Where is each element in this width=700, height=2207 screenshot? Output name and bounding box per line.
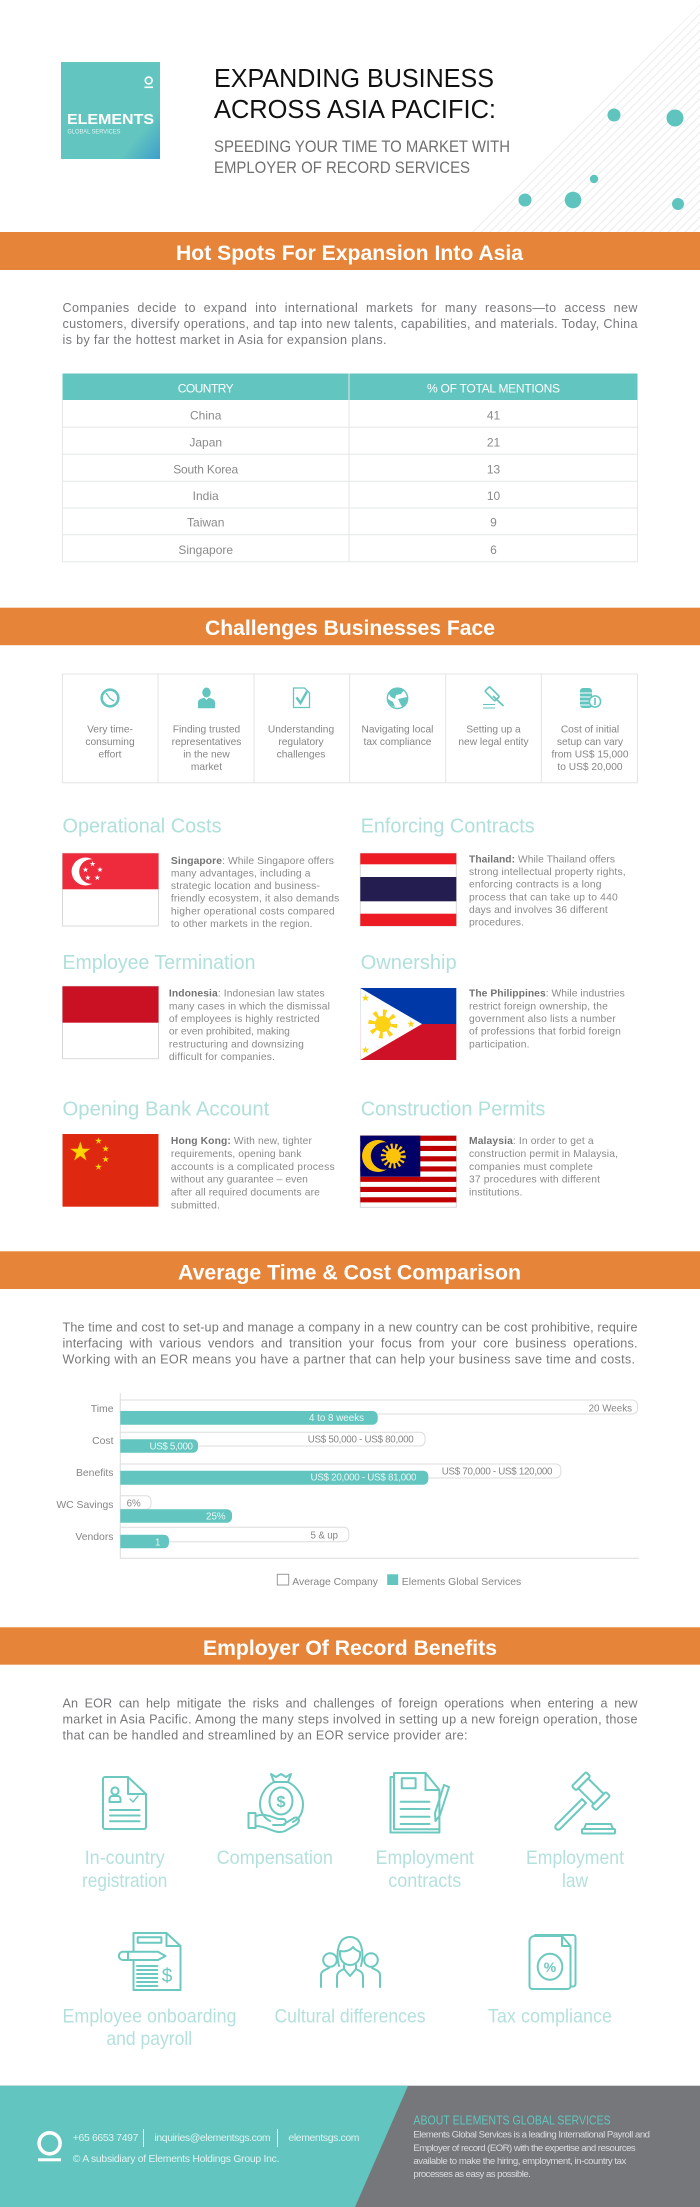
heading: enforcing contracts: Enforcing Contracts — [361, 816, 535, 838]
title: EXPANDING BUSINESS — [214, 65, 494, 93]
label: employment contracts: contracts — [388, 1870, 462, 1892]
text: Thailand: enforcing contracts is a long — [469, 880, 602, 891]
text: Thailand: procedures. — [469, 918, 524, 929]
text: Indonesia: Indonesia: Indonesian law states — [169, 989, 325, 1000]
challenge text: legal entity — [458, 724, 530, 748]
text: Malaysia: companies must complete — [469, 1162, 593, 1173]
table: hot spots: 13 — [487, 462, 500, 476]
text: Singapore: strategic location and business- — [171, 881, 320, 892]
text: Thailand: days and involves 36 different — [469, 905, 608, 916]
table: hot spots: Japan — [189, 436, 222, 450]
about text: ABOUT ELEMENTS GLOBAL SERVICES — [413, 2114, 611, 2128]
text: Hong Kong: requirements, opening bank — [171, 1149, 302, 1160]
table: hot spots: % OF TOTAL MENTIONS — [427, 382, 560, 396]
row: vendors: Vendors — [75, 1532, 114, 1543]
flag: Indonesia — [62, 986, 158, 1059]
benefit: tax compliance: % — [544, 1959, 557, 1975]
label: onboarding and payroll: Employee onboarding — [62, 2006, 236, 2028]
row: time — [91, 1400, 638, 1425]
panel: challenge grid — [62, 674, 638, 783]
row: vendors — [75, 1527, 349, 1548]
row: cost: Cost — [92, 1436, 114, 1447]
title: ACROSS ASIA PACIFIC: — [214, 96, 496, 124]
intro paragraph: benefits: An EOR can help mitigate the risks and challenges of foreign operations when entering a new — [62, 1696, 638, 1710]
challenge text: regulatory: Understanding — [268, 724, 334, 735]
row: wc savings — [56, 1496, 232, 1523]
icon: tax document — [529, 1935, 576, 1989]
benefit: cultural differences — [274, 1937, 426, 2028]
label: employment law: law — [562, 1870, 589, 1892]
section banner: benefits: Employer Of Record Benefits — [203, 1637, 497, 1660]
challenge text: regulatory — [268, 724, 334, 760]
table: hot spots: China — [190, 408, 222, 422]
text: Malaysia: institutions. — [469, 1188, 522, 1199]
section banner: challenges: Challenges Businesses Face — [205, 617, 495, 640]
row: cost: US$ 50,000 - US$ 80,000 — [308, 1435, 414, 1446]
text: Malaysia: Malaysia: In order to get a — [469, 1136, 594, 1147]
table: hot spots: 41 — [487, 408, 500, 422]
about text: processes as easy as possible. — [413, 2169, 531, 2180]
challenge text: setup cost: setup can vary — [557, 737, 624, 748]
footer contacts: +65 6653 7497 — [73, 2133, 139, 2144]
text: Singapore: many advantages, including a — [171, 868, 311, 880]
text: Philippines: The Philippines: While industries — [469, 989, 625, 1000]
intro paragraph: comparison: interfacing with various vendors and transition your focus from your core business operations. — [62, 1336, 638, 1350]
label: employment contracts — [376, 1847, 474, 1892]
panel: enforcing contracts — [360, 816, 626, 929]
row: benefits: US$ 70,000 - US$ 120,000 — [442, 1467, 553, 1478]
intro paragraph: hot spots: is by far the hottest market in Asia for expansion plans. — [62, 333, 386, 347]
intro paragraph: hot spots — [62, 301, 638, 347]
text: Malaysia: 37 procedures with different — [469, 1175, 600, 1186]
table: hot spots: India — [193, 489, 219, 503]
footer contacts — [73, 2129, 359, 2165]
challenge text: legal entity: new legal entity — [458, 737, 530, 748]
subtitle: EMPLOYER OF RECORD SERVICES — [214, 158, 470, 177]
text: Singapore: friendly ecosystem, it also demands — [171, 894, 339, 905]
panel: opening bank account — [62, 1099, 335, 1212]
text: Philippines: of professions that forbid foreign — [469, 1027, 621, 1038]
row: benefits — [76, 1464, 561, 1485]
heading: construction permits: Construction Permits — [361, 1099, 545, 1121]
table: hot spots: 21 — [487, 436, 500, 450]
challenge text: regulatory: regulatory — [278, 737, 325, 748]
challenge text: representatives: Finding trusted — [173, 724, 241, 735]
challenge text: setup cost: from US$ 15,000 — [551, 749, 629, 760]
about text: Elements Global Services is a leading International Payroll and — [413, 2130, 650, 2141]
text: Hong Kong: after all required documents are — [171, 1188, 320, 1199]
text: Thailand — [469, 854, 626, 929]
challenge text: representatives — [172, 724, 241, 773]
intro paragraph: comparison: Working with an EOR means you have a partner that can help your business save time and costs. — [62, 1352, 635, 1366]
panel: operational costs — [62, 816, 339, 930]
footer contacts: elementsgs.com — [288, 2133, 359, 2144]
table: hot spots: COUNTRY — [178, 382, 234, 396]
challenge text: setup cost: Cost of initial — [561, 724, 619, 735]
footer contacts: © A subsidiary of Elements Holdings Group Inc. — [73, 2154, 280, 2165]
label: cultural differences: Cultural differences — [274, 2006, 426, 2028]
text: Philippines: participation. — [469, 1039, 530, 1050]
about text — [413, 2114, 650, 2180]
icon: group of people — [321, 1937, 380, 1987]
section banner: challenges — [0, 608, 700, 645]
panel: employee termination — [62, 952, 330, 1063]
text: Hong Kong: without any guarantee – even — [170, 1175, 308, 1186]
table: hot spots: South Korea — [173, 462, 239, 476]
footer — [0, 2086, 700, 2207]
text: Philippines — [469, 989, 625, 1050]
text: Singapore: higher operational costs compared — [171, 906, 335, 917]
icon: document check — [294, 688, 310, 708]
row: cost: US$ 5,000 — [150, 1441, 194, 1452]
legend: Average Company — [292, 1577, 379, 1588]
row: vendors: 5 & up — [310, 1530, 339, 1541]
benefit: employee onboarding and payroll — [62, 1933, 236, 2050]
text: Singapore — [171, 856, 339, 930]
benefit: employee onboarding and payroll: $ — [162, 1966, 173, 1987]
intro paragraph: benefits — [62, 1696, 638, 1742]
text: Hong Kong: Hong Kong: With new, tighter — [171, 1136, 312, 1147]
icon: person — [198, 688, 215, 708]
text: Philippines: restrict foreign ownership, the — [469, 1001, 608, 1012]
text: Hong Kong: submitted. — [171, 1201, 220, 1212]
challenge text: regulatory: challenges — [277, 749, 325, 760]
section banner: benefits — [0, 1627, 700, 1665]
footer logo — [38, 2133, 61, 2161]
logo: ELEMENTS — [67, 111, 154, 128]
subtitle: SPEEDING YOUR TIME TO MARKET WITH — [214, 137, 510, 156]
intro paragraph: comparison — [62, 1320, 638, 1366]
icon: contract with pen — [390, 1773, 449, 1832]
challenge text: representatives: representatives — [172, 737, 241, 748]
row: benefits: Benefits — [76, 1468, 114, 1479]
challenge text: representatives: market — [191, 762, 222, 773]
icon: small gavel — [483, 687, 504, 708]
row: time: Time — [91, 1404, 114, 1415]
text: Singapore: to other markets in the region. — [171, 919, 312, 930]
label: in-country registration: In-country — [85, 1847, 165, 1869]
about text: available to make the hiring, employment, in-country tax — [413, 2156, 627, 2167]
challenge text: time: Very time- — [87, 724, 133, 735]
icon: clock — [102, 690, 118, 706]
benefit: compensation: $ — [277, 1794, 286, 1811]
panel: construction permits — [360, 1099, 618, 1207]
table: hot spots: Taiwan — [187, 516, 224, 530]
bar chart: time and cost — [56, 1393, 639, 1558]
benefit: employment contracts — [376, 1773, 474, 1892]
row: wc savings: WC Savings — [56, 1500, 114, 1511]
heading: ownership: Ownership — [361, 952, 457, 974]
challenge text: tax — [362, 724, 433, 748]
label: employment law — [526, 1847, 625, 1892]
text: Indonesia: of employees is highly restricted — [169, 1014, 320, 1025]
flag: Malaysia — [360, 1136, 456, 1207]
challenge text: representatives: in the new — [183, 749, 230, 760]
subtitle — [214, 137, 510, 177]
section banner: comparison — [0, 1251, 700, 1289]
flag: Singapore — [62, 853, 158, 926]
table: hot spots: Singapore — [178, 543, 233, 557]
table: hot spots: 9 — [490, 516, 497, 530]
text: Indonesia: many cases in which the dismissal — [169, 1001, 330, 1012]
intro paragraph: hot spots: customers, diversify operations, and tap into new talents, capabilities, and materials. Today, China — [62, 317, 637, 331]
row: wc savings: 6% — [127, 1499, 141, 1510]
flag: Thailand — [360, 853, 456, 926]
intro paragraph: hot spots: Companies decide to expand into international markets for many reasons—to access new — [62, 301, 638, 315]
text: Philippines: government also lists a number — [469, 1014, 616, 1025]
row: benefits: US$ 20,000 - US$ 81,000 — [310, 1473, 417, 1484]
benefit: tax compliance — [488, 1935, 612, 2028]
label: tax compliance: Tax compliance — [488, 2006, 612, 2028]
about text: Employer of record (EOR) with the expertise and resources — [413, 2143, 636, 2154]
heading: employee termination: Employee Termination — [62, 952, 256, 974]
panel: ownership — [360, 952, 625, 1060]
icon: money bag in hand — [248, 1774, 303, 1832]
challenge text: time — [85, 724, 135, 760]
intro paragraph: benefits: that can be handled and streamlined by an EOR service provider are: — [62, 1728, 468, 1742]
legend — [277, 1574, 521, 1588]
challenge text: time: consuming — [85, 737, 135, 748]
legend: Elements Global Services — [402, 1577, 521, 1588]
text: Malaysia: construction permit in Malaysia, — [469, 1149, 618, 1160]
text: Thailand: strong intellectual property rights, — [469, 867, 626, 878]
challenge text: setup cost — [551, 724, 629, 773]
row: cost — [92, 1432, 425, 1453]
title — [214, 65, 496, 124]
row: wc savings: 25% — [206, 1512, 226, 1523]
label: employment law: Employment — [526, 1847, 625, 1869]
row: vendors: 1 — [155, 1537, 160, 1548]
text: Malaysia — [469, 1136, 618, 1199]
text: Indonesia — [169, 989, 330, 1063]
challenge text: setup cost: to US$ 20,000 — [557, 762, 623, 773]
label: onboarding and payroll: and payroll — [106, 2028, 192, 2050]
icon: gavel — [555, 1772, 615, 1834]
label: compensation: Compensation — [217, 1847, 333, 1869]
text: Indonesia: or even prohibited, making — [169, 1027, 290, 1038]
label: in-country registration — [82, 1847, 167, 1892]
icon: globe — [387, 688, 408, 708]
text: Indonesia: difficult for companies. — [169, 1052, 275, 1063]
challenge text: tax: Navigating local — [362, 724, 433, 735]
intro paragraph: benefits: market in Asia Pacific. Among the many steps involved in setting up a new foreign operation, those — [62, 1712, 638, 1726]
background hatch with dots — [469, 5, 700, 232]
benefit: employment law — [526, 1772, 625, 1892]
challenge text: legal entity: Setting up a — [466, 724, 521, 735]
label: in-country registration: registration — [82, 1870, 167, 1892]
heading: operational costs: Operational Costs — [62, 816, 222, 838]
text: Singapore: Singapore: While Singapore offers — [171, 856, 334, 867]
challenge text: tax: tax compliance — [364, 737, 432, 748]
flag: China — [62, 1134, 158, 1207]
label: employment contracts: Employment — [376, 1847, 474, 1869]
section banner: hot spots: Hot Spots For Expansion Into Asia — [176, 242, 523, 265]
icon: coins — [580, 688, 601, 708]
table: hot spots: 6 — [490, 543, 497, 557]
section banner: hot spots — [0, 232, 700, 270]
intro paragraph: comparison: The time and cost to set-up and manage a company in a new country can be cost prohibitive, require — [62, 1320, 638, 1334]
section banner: comparison: Average Time & Cost Comparison — [178, 1261, 521, 1284]
text: Thailand: Thailand: While Thailand offers — [469, 854, 615, 865]
table: hot spots — [62, 374, 638, 562]
footer contacts: inquiries@elementsgs.com — [154, 2133, 270, 2144]
benefit: compensation — [217, 1774, 333, 1869]
text: Thailand: process that can take up to 440 — [469, 892, 618, 903]
row: time: 20 Weeks — [589, 1404, 632, 1414]
label: onboarding and payroll — [62, 2006, 236, 2050]
challenge text: time: effort — [98, 749, 122, 760]
flag: Philippines — [360, 988, 456, 1060]
heading: opening bank account: Opening Bank Account — [62, 1099, 270, 1121]
icon: payroll document with pencil — [119, 1933, 180, 1990]
text: Indonesia: restructuring and downsizing — [169, 1039, 304, 1050]
benefit: in-country registration — [82, 1777, 167, 1892]
logo: GLOBAL SERVICES — [67, 128, 121, 135]
row: time: 4 to 8 weeks — [309, 1413, 364, 1424]
icon: registration document — [103, 1777, 146, 1829]
text: Hong Kong: accounts is a complicated process — [171, 1162, 335, 1173]
text: Hong Kong — [170, 1136, 335, 1212]
table: hot spots: 10 — [487, 489, 500, 503]
logo — [61, 62, 160, 159]
